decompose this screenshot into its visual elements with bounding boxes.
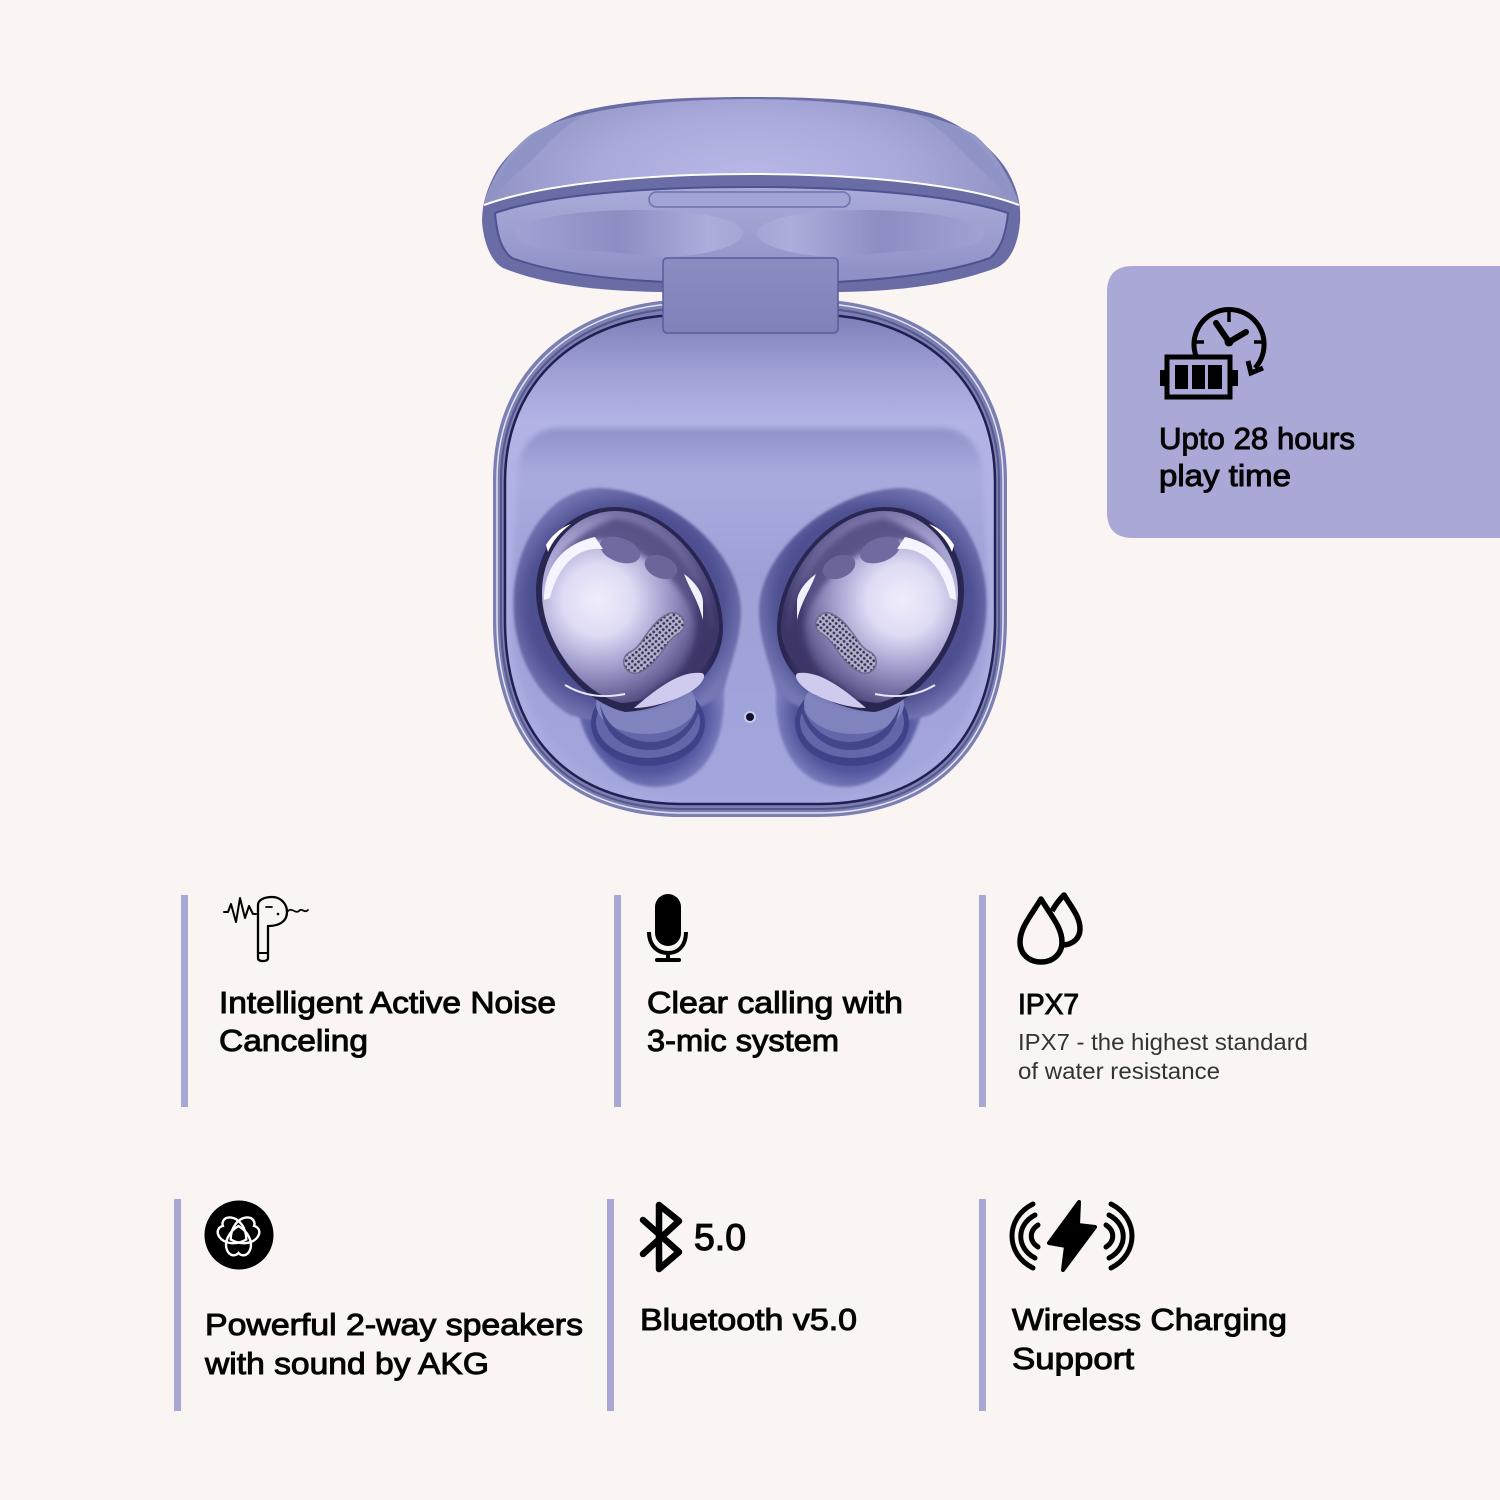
feature: speakers xyxy=(174,1199,583,1411)
text: battery xyxy=(1159,421,1355,493)
icon: microphone xyxy=(649,894,686,962)
product image: open charging case with earbuds xyxy=(482,97,1020,817)
icon: AKG speaker logo xyxy=(204,1200,274,1270)
text: water resistance xyxy=(1018,1029,1308,1084)
text: noise canceling xyxy=(219,985,556,1058)
right earbud xyxy=(759,488,986,787)
text: water resistance: IPX7 - the highest standard xyxy=(1018,1029,1308,1055)
text: noise canceling: Intelligent Active Noise xyxy=(219,985,556,1020)
text: wireless charging xyxy=(1012,1302,1287,1376)
text: wireless charging: Support xyxy=(1012,1341,1134,1376)
case lid xyxy=(482,97,1020,292)
text: calling xyxy=(647,985,903,1058)
text: noise canceling: Canceling xyxy=(219,1023,368,1058)
hinge xyxy=(663,258,838,333)
text: calling: 3-mic system xyxy=(647,1023,839,1058)
text: battery: play time xyxy=(1159,458,1291,493)
heading: IPX7: IPX7 xyxy=(1018,989,1079,1021)
text: bluetooth: Bluetooth v5.0 xyxy=(640,1302,857,1337)
text: wireless charging: Wireless Charging xyxy=(1012,1302,1287,1337)
icon: earbud with sound wave xyxy=(224,897,308,961)
icon: battery and clock xyxy=(1160,310,1264,397)
text: battery: Upto 28 hours xyxy=(1159,421,1355,456)
text: speakers: with sound by AKG xyxy=(204,1346,489,1381)
feature: bluetooth xyxy=(607,1199,857,1411)
feature: noise canceling xyxy=(181,895,556,1107)
battery panel xyxy=(1107,266,1500,538)
feature: water resistance xyxy=(979,895,1308,1107)
text: speakers: Powerful 2-way speakers xyxy=(205,1307,583,1342)
text: water resistance: of water resistance xyxy=(1018,1058,1220,1084)
icon: bluetooth xyxy=(643,1205,679,1269)
text: speakers xyxy=(204,1307,583,1381)
text: calling: Clear calling with xyxy=(647,985,903,1020)
left earbud xyxy=(514,488,741,787)
tray recess xyxy=(510,428,990,798)
icon: water drops xyxy=(1020,895,1080,962)
feature: calling xyxy=(614,894,903,1107)
icon: wireless charging bolt xyxy=(1012,1202,1132,1270)
feature: wireless charging xyxy=(979,1199,1287,1411)
case base xyxy=(493,301,1007,817)
text: 5.0: 5.0 xyxy=(694,1217,746,1258)
LED dot xyxy=(744,711,756,723)
